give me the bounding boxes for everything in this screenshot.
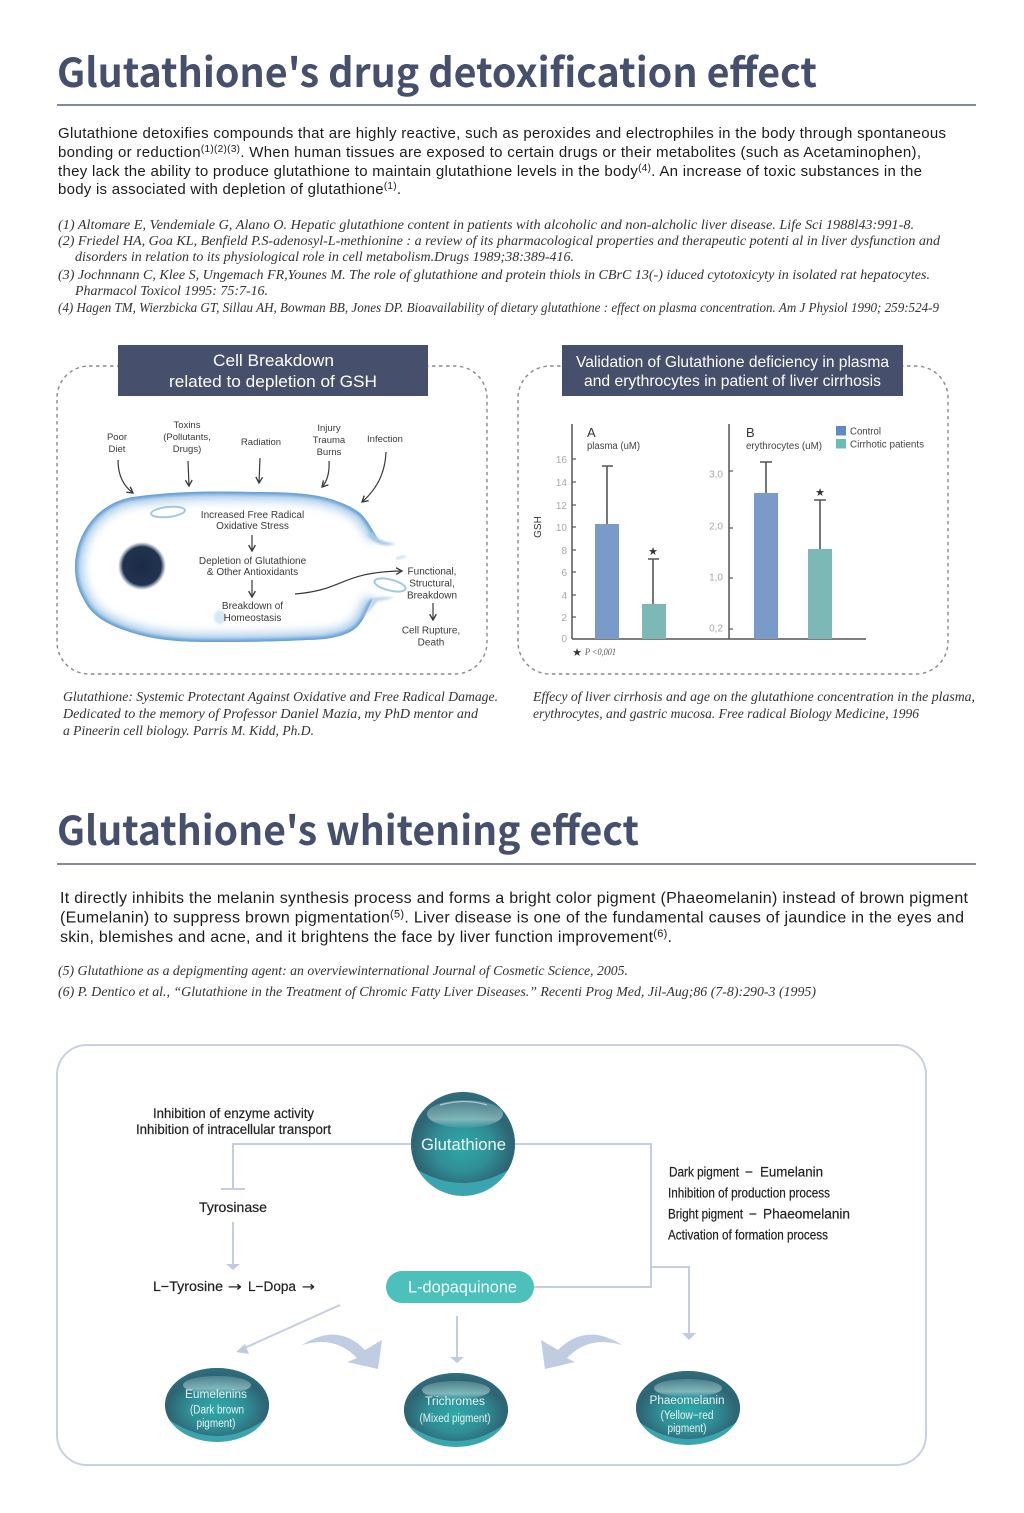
pigment notes: Inhibition of production process <box>668 1186 830 1200</box>
heading: validation: Validation of Glutathione deficiency in plasma <box>576 354 889 371</box>
cell pathway text: Death <box>418 638 444 648</box>
pigment notes: − <box>745 1164 753 1180</box>
text block: detoxification description: (1) <box>384 181 397 192</box>
pigment notes: Phaeomelanin <box>763 1206 850 1222</box>
node: Phaeomelanin <box>636 1371 740 1445</box>
bar chart: A plasma: 2 <box>561 613 567 624</box>
text block: detoxification description: . An increase of toxic substances in the <box>651 163 922 180</box>
bar chart: A plasma: plasma (uM) <box>587 441 640 452</box>
cell illustration <box>75 492 407 642</box>
title: whitening: Glutathione's whitening effect <box>57 799 639 857</box>
cell pathway text: Depletion of Glutathione <box>199 556 307 567</box>
bar chart: B erythrocytes: 3,0 <box>709 470 723 480</box>
pigment notes: Bright pigment <box>668 1206 743 1222</box>
cause labels: Toxins <box>174 420 201 431</box>
pigment notes: Eumelanin <box>760 1164 823 1180</box>
cell pathway text: Functional, <box>408 566 456 578</box>
caption: chart source <box>532 689 975 721</box>
cause labels: Burns <box>317 447 342 458</box>
label: L-Tyrosine and L-Dopa: L−Tyrosine <box>153 1279 223 1294</box>
inhibition label <box>136 1106 331 1137</box>
cell pathway text: & Other Antioxidants <box>207 567 298 578</box>
text block: detoxification description: . When human tissues are exposed to certain drugs or their metabolites (such as Acetaminophen), <box>240 144 921 161</box>
bar chart: A plasma: 16 <box>556 455 567 466</box>
bar chart: A plasma: 10 <box>556 523 567 534</box>
text block: detoxification description: body is associated with depletion of glutathione <box>58 181 384 198</box>
references 5 and 6: (6) P. Dentico et al., “Glutathione in the Treatment of Chromic Fatty Liver Diseases.” Recenti Prog Med, Jil-Aug;86 (7-8):290-3 (1995) <box>58 984 817 999</box>
cell pathway text: Breakdown <box>407 590 457 602</box>
node: Eumelenins: (Dark brown <box>190 1404 244 1416</box>
bar chart: A plasma: 0 <box>561 634 567 645</box>
node: Eumelenins <box>165 1368 269 1442</box>
text block: detoxification description: they lack the ability to produce glutathione to maintain glutathione levels in the body <box>58 163 638 180</box>
heading: cell breakdown: Cell Breakdown <box>213 351 334 370</box>
cell pathway text: Cell Rupture, <box>402 626 460 636</box>
pigment notes: − <box>749 1206 757 1222</box>
big curved arrow: right <box>541 1335 622 1369</box>
arrows into the cell <box>118 452 386 502</box>
cause labels: Infection <box>367 434 403 445</box>
panel: melanin pathway <box>57 1045 926 1465</box>
node: Eumelenins: pigment) <box>196 1418 236 1430</box>
bar chart: A plasma: 8 <box>561 546 567 557</box>
text block: whitening description: (Eumelanin) to suppress brown pigmentation <box>60 910 390 926</box>
text block: whitening description: (6) <box>653 928 667 940</box>
references 1 to 4: (1) Altomare E, Vendemiale G, Alano O. Hepatic glutathione content in patients with alcoholic and non-alcholic liver disease. Life Sci 1988l43:991-8. <box>58 217 914 232</box>
node: Phaeomelanin: Phaeomelanin <box>650 1395 724 1407</box>
legend: Control <box>850 426 881 438</box>
pigment notes: Activation of formation process <box>668 1228 828 1242</box>
label: L-Tyrosine and L-Dopa: → <box>302 1279 315 1295</box>
bar chart: B erythrocytes: ★ <box>815 487 825 499</box>
label: L-Tyrosine and L-Dopa: → <box>228 1279 242 1295</box>
node: Trichromes: (Mixed pigment) <box>420 1413 491 1425</box>
references 1 to 4: disorders in relation to its physiological role in cell metabolism.Drugs 1989;38:389-416. <box>75 249 574 264</box>
text block: whitening description: skin, blemishes and acne, and it brightens the face by liver function improvement <box>60 929 653 946</box>
heading: validation <box>562 345 903 396</box>
bar chart: A plasma: GSH <box>533 516 544 538</box>
node: Phaeomelanin: pigment) <box>668 1423 707 1435</box>
bar chart: A plasma: ★ <box>572 647 582 659</box>
label: L-Tyrosine and L-Dopa <box>153 1279 315 1295</box>
text block: whitening description <box>60 890 969 946</box>
cell pathway text: Oxidative Stress <box>216 521 289 532</box>
bar chart: B erythrocytes: B <box>746 425 755 440</box>
node: Trichromes: Trichromes <box>425 1396 485 1408</box>
references 5 and 6: (5) Glutathione as a depigmenting agent: an overviewinternational Journal of Cosmetic Science, 2005. <box>58 963 628 978</box>
node: Glutathione: Glutathione <box>421 1136 506 1154</box>
references 5 and 6 <box>58 963 817 999</box>
cause labels: Radiation <box>241 437 281 448</box>
pigment notes: Dark pigment <box>669 1164 739 1180</box>
inhibition label: Inhibition of enzyme activity <box>153 1106 314 1121</box>
cell pathway text: Homeostasis <box>224 613 281 624</box>
bar chart: B erythrocytes: 2,0 <box>709 522 723 532</box>
arrowheads <box>226 1264 696 1363</box>
bar chart: B erythrocytes <box>709 424 866 639</box>
nucleus <box>118 542 166 590</box>
heading: cell breakdown: related to depletion of GSH <box>169 372 377 391</box>
cause labels: Diet <box>109 444 126 455</box>
references 1 to 4: (4) Hagen TM, Wierzbicka GT, Sillau AH, Bowman BB, Jones DP. Bioavailability of dietary glutathione : effect on plasma concentration. Am J Physiol 1990; 259:524-9 <box>58 300 939 315</box>
panel: GSH deficiency chart <box>518 345 948 674</box>
text block: detoxification description: bonding or reduction <box>58 144 201 161</box>
cause labels: Trauma <box>313 435 346 446</box>
text block: detoxification description: (1)(2)(3) <box>201 144 240 155</box>
references 1 to 4: (2) Friedel HA, Goa KL, Benfield P.S-adenosyl-L-methionine : a review of its pharmacological properties and therapeutic potenti al in liver dysfunction and <box>58 233 940 248</box>
text block: whitening description: . Liver disease is one of the fundamental causes of jaundice in the eyes and <box>404 910 964 926</box>
bar chart: B erythrocytes: 0,2 <box>709 624 723 634</box>
heading: validation: and erythrocytes in patient of liver cirrhosis <box>584 373 881 390</box>
caption: chart source: erythrocytes, and gastric mucosa. Free radical Biology Medicine, 1996 <box>533 706 919 721</box>
inhibition label: Inhibition of intracellular transport <box>136 1122 331 1137</box>
bar chart: A plasma: 6 <box>561 568 567 579</box>
node: L-dopaquinone <box>386 1271 534 1303</box>
bar chart: B erythrocytes: erythrocytes (uM) <box>746 441 822 452</box>
caption: cell breakdown source: Glutathione: Systemic Protectant Against Oxidative and Free Radical Damage. <box>63 689 498 704</box>
node: Eumelenins: Eumelenins <box>185 1389 247 1401</box>
connector lines <box>221 1144 689 1358</box>
text block: detoxification description: Glutathione detoxifies compounds that are highly reactive, such as peroxides and electrophiles in the body through spontaneous <box>58 125 946 142</box>
legend <box>836 426 924 450</box>
text block: whitening description: . <box>668 929 672 946</box>
bar chart: B erythrocytes: 1,0 <box>709 572 723 584</box>
text block: detoxification description <box>58 125 946 198</box>
node: Glutathione <box>411 1092 515 1196</box>
heading: cell breakdown <box>118 345 428 396</box>
bar chart: A plasma: 12 <box>556 501 567 512</box>
title: drug detoxification: Glutathione's drug detoxification effect <box>57 41 817 99</box>
cause labels: Poor <box>107 432 127 443</box>
cell pathway text: Breakdown of <box>222 601 283 612</box>
bar chart: A plasma <box>533 424 729 659</box>
big curved arrow: left <box>302 1335 382 1369</box>
references 1 to 4: (3) Jochnnann C, Klee S, Ungemach FR,Younes M. The role of glutathione and protein thiols in CBrC 13(-) iduced cytotoxicyty in isolated rat hepatocytes. <box>58 267 930 282</box>
caption: cell breakdown source: Dedicated to the memory of Professor Daniel Mazia, my PhD mentor and <box>62 706 478 721</box>
legend: Cirrhotic patients <box>850 440 924 450</box>
bar chart: A plasma: 4 <box>561 591 567 602</box>
bar chart: A plasma: P <0,001 <box>584 647 616 657</box>
cell pathway text <box>199 510 460 648</box>
cause labels <box>107 420 403 458</box>
cause labels: (Pollutants, <box>163 432 211 443</box>
references 1 to 4 <box>58 217 940 315</box>
caption: cell breakdown source: a Pineerin cell biology. Parris M. Kidd, Ph.D. <box>63 723 314 738</box>
node: Phaeomelanin: (Yellow−red <box>660 1410 714 1422</box>
panel: cell breakdown <box>57 345 487 674</box>
cell pathway text: Increased Free Radical <box>201 510 304 521</box>
node: L-dopaquinone: L-dopaquinone <box>408 1278 517 1296</box>
pigment notes <box>668 1164 850 1242</box>
cause labels: Injury <box>317 423 341 434</box>
cause labels: Drugs) <box>173 444 201 455</box>
text block: detoxification description: (4) <box>638 163 651 174</box>
text block: whitening description: (5) <box>390 908 404 920</box>
cell pathway text: Structural, <box>409 578 455 590</box>
text block: detoxification description: . <box>397 181 401 198</box>
pathway arrows <box>252 535 433 620</box>
caption: cell breakdown source <box>62 689 498 738</box>
label: L-Tyrosine and L-Dopa: L−Dopa <box>248 1279 296 1294</box>
node: Trichromes <box>404 1373 508 1447</box>
bar chart: A plasma: A <box>587 425 596 440</box>
bar chart: A plasma: 14 <box>556 478 567 489</box>
text block: whitening description: It directly inhibits the melanin synthesis process and forms a bright color pigment (Phaeomelanin) instead of brown pigment <box>60 890 969 907</box>
bar chart: A plasma: ★ <box>648 546 658 558</box>
label: Tyrosinase: Tyrosinase <box>199 1200 267 1215</box>
caption: chart source: Effecy of liver cirrhosis and age on the glutathione concentration in the plasma, <box>532 689 975 704</box>
references 1 to 4: Pharmacol Toxicol 1995: 75:7-16. <box>74 283 268 298</box>
